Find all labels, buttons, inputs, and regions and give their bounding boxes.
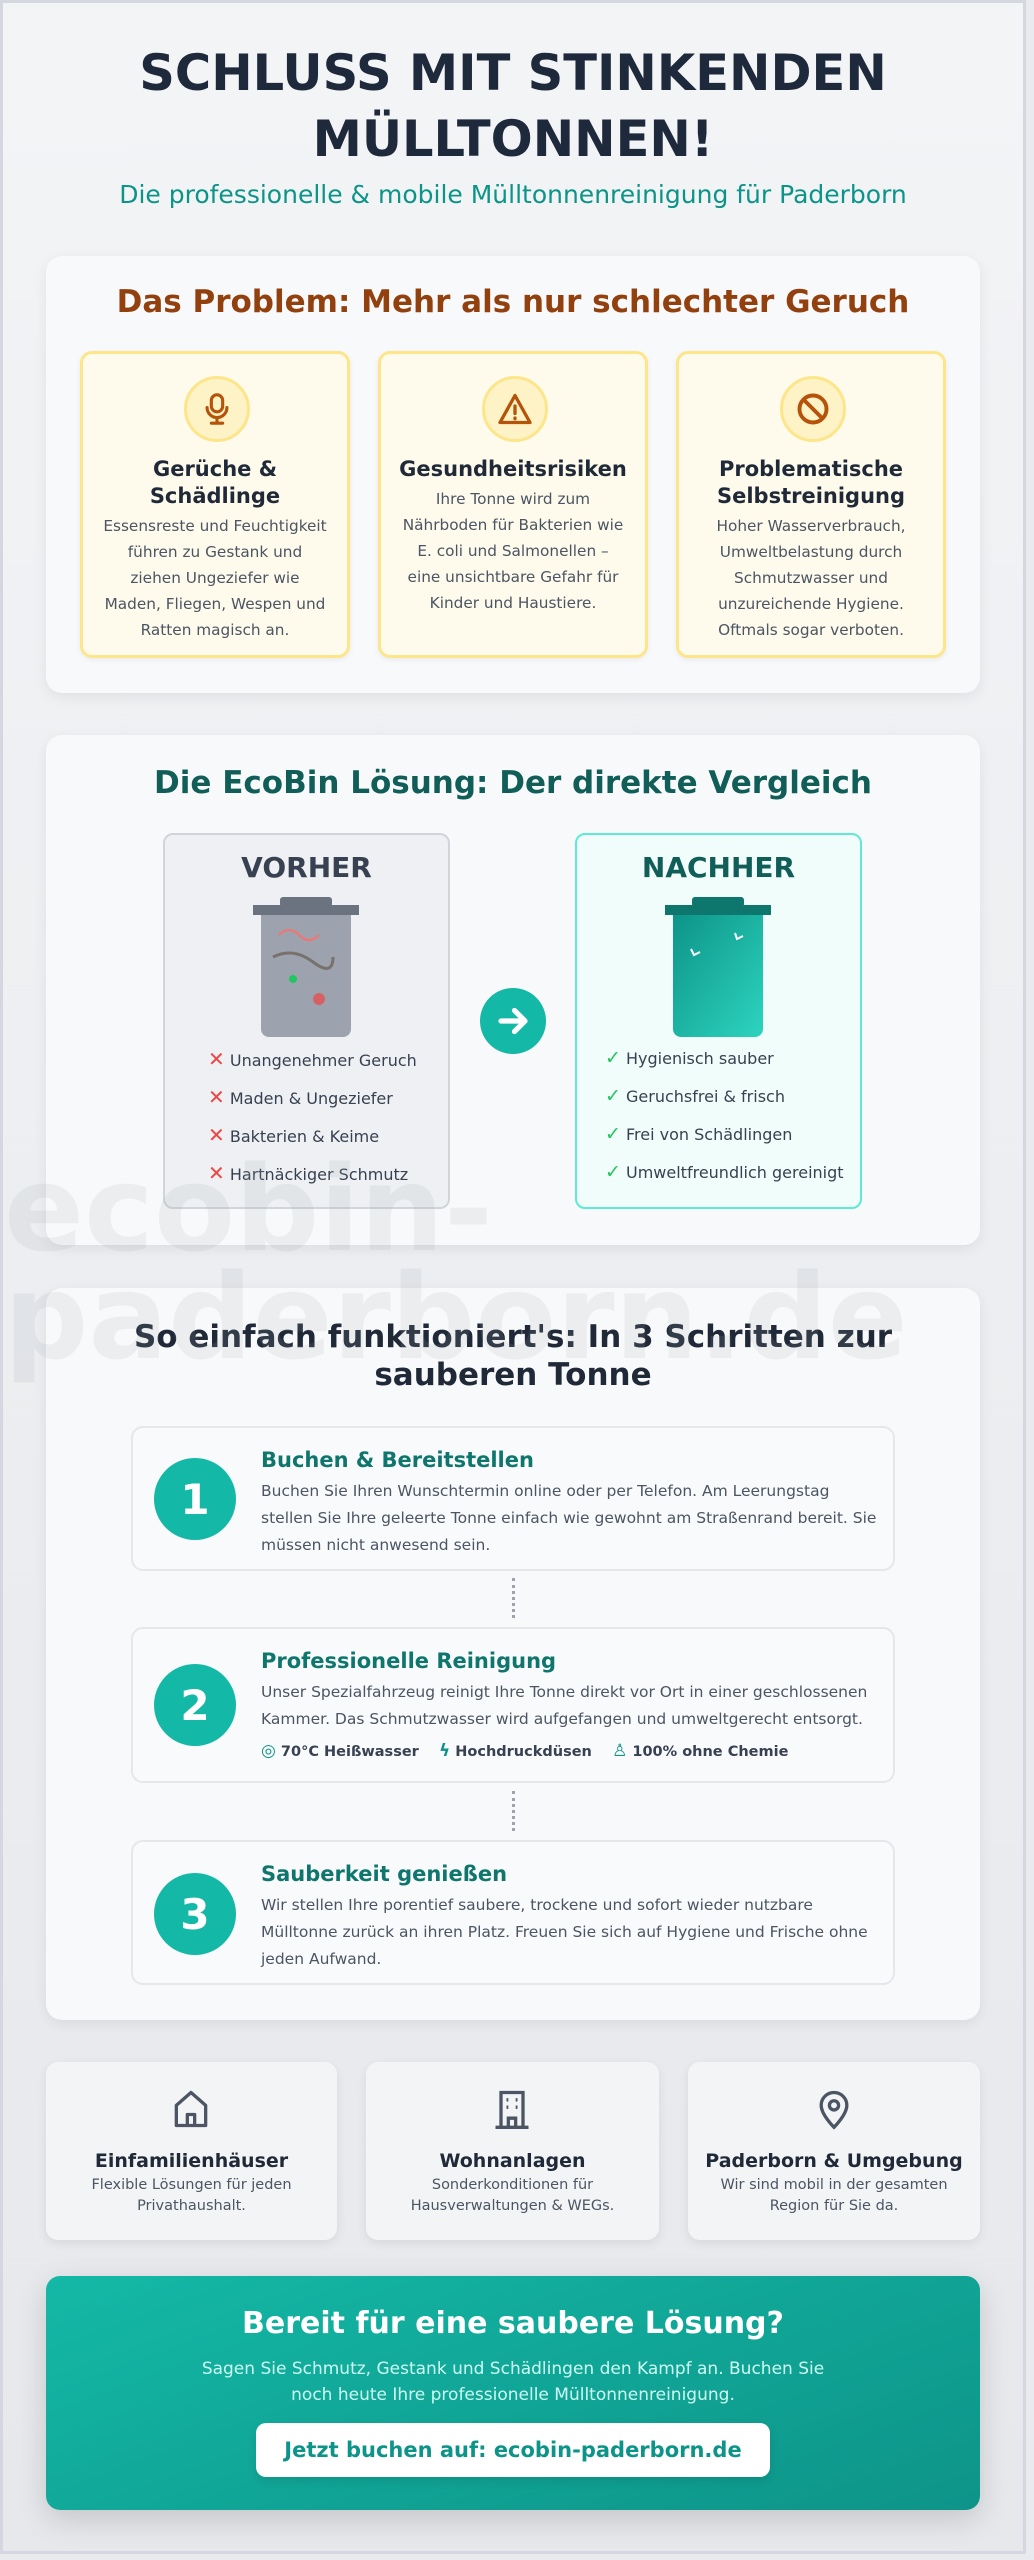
card: health risks: Gesundheitsrisiken (399, 457, 627, 481)
step 2: 2 (180, 1680, 210, 1730)
step 2: Professionelle Reinigung (261, 1649, 556, 1673)
list: nachher: ✓ Hygienisch sauber (605, 1047, 774, 1069)
heading: steps (134, 1319, 892, 1393)
card: single-family homes: Flexible Lösungen für jeden (91, 2177, 292, 2193)
list: vorher: ✕ Hartnäckiger Schmutz (208, 1161, 408, 1185)
features row: ◎ 70°C Heißwasser ϟ Hochdruckdüsen ♙ 100% ohne Chemie (261, 1741, 788, 1761)
step 1: Buchen & Bereitstellen (261, 1448, 534, 1472)
icon: building (496, 2090, 528, 2129)
box: vorher (163, 833, 450, 1209)
icon: microphone (184, 376, 250, 442)
step 1 (131, 1426, 895, 1571)
card: health risks: Kinder und Haustiere. (430, 594, 596, 612)
title: MÜLLTONNEN! (313, 110, 713, 168)
title: SCHLUSS MIT STINKENDEN (139, 44, 887, 102)
panel: problem (46, 256, 980, 693)
step 1: stellen Sie Ihre geleerte Tonne einfach wie gewohnt am Straßenrand bereit. Sie (261, 1509, 876, 1527)
cta panel (46, 2276, 980, 2510)
card: single-family homes: Privathaushalt. (137, 2198, 246, 2214)
list: vorher: ✕ Unangenehmer Geruch (208, 1047, 417, 1071)
step 2: Unser Spezialfahrzeug reinigt Ihre Tonne direkt vor Ort in einer geschlossenen (261, 1683, 867, 1701)
heading: steps: So einfach funktioniert's: In 3 Schritten zur (134, 1319, 892, 1355)
cta text: Sagen Sie Schmutz, Gestank und Schädlingen den Kampf an. Buchen Sie (202, 2359, 824, 2379)
list: nachher: ✓ Umweltfreundlich gereinigt (605, 1161, 844, 1183)
card: single-family homes (46, 2062, 337, 2240)
card: apartments: Sonderkonditionen für (432, 2177, 593, 2193)
cta button (256, 2423, 770, 2477)
card: self-cleaning (676, 351, 946, 658)
icon: dirty bin (253, 897, 359, 1037)
heading: problem: Das Problem: Mehr als nur schlechter Geruch (117, 284, 909, 320)
card: self-cleaning: Umweltbelastung durch (720, 543, 902, 561)
panel: steps (46, 1288, 980, 2020)
icon: house (174, 2090, 208, 2128)
arrow (480, 988, 546, 1054)
heading: solution: Die EcoBin Lösung: Der direkte Vergleich (154, 765, 872, 801)
list: vorher: ✕ Bakterien & Keime (208, 1123, 379, 1147)
card: smells & pests: Maden, Fliegen, Wespen und (105, 595, 325, 613)
list: nachher (605, 1047, 844, 1183)
box: nachher: NACHHER (642, 851, 795, 884)
icon: warning (482, 376, 548, 442)
watermark: paderborn.de (4, 1248, 908, 1386)
list: vorher (208, 1047, 417, 1185)
icon: location pin (820, 2090, 848, 2130)
step 2 (131, 1627, 895, 1783)
card: health risks (378, 351, 648, 658)
card: smells & pests (80, 351, 350, 658)
card: single-family homes: Einfamilienhäuser (95, 2150, 288, 2172)
card: region: Wir sind mobil in der gesamten (720, 2177, 948, 2193)
step 1: müssen nicht anwesend sein. (261, 1536, 490, 1554)
cta button: Jetzt buchen auf: ecobin-paderborn.de (284, 2438, 742, 2462)
step 3: jeden Aufwand. (261, 1950, 381, 1968)
card: health risks: E. coli und Salmonellen – (417, 542, 609, 560)
card: apartments (366, 2062, 659, 2240)
card: self-cleaning: Oftmals sogar verboten. (718, 621, 904, 639)
card: region (688, 2062, 980, 2240)
panel: solution comparison (46, 735, 980, 1245)
card: self-cleaning: unzureichende Hygiene. (718, 595, 904, 613)
list: vorher: ✕ Maden & Ungeziefer (208, 1085, 393, 1109)
list: nachher: ✓ Geruchsfrei & frisch (605, 1085, 785, 1107)
heading: steps: sauberen Tonne (374, 1357, 652, 1393)
icon: clean bin (665, 897, 771, 1037)
card: smells & pests: ziehen Ungeziefer wie (130, 569, 300, 587)
box: vorher: VORHER (241, 851, 372, 884)
card: region: Region für Sie da. (770, 2198, 898, 2214)
list: nachher: ✓ Frei von Schädlingen (605, 1123, 792, 1145)
card: smells & pests: Gerüche & (153, 457, 277, 481)
step 3: 3 (180, 1890, 210, 1938)
step 1: Buchen Sie Ihren Wunschtermin online oder per Telefon. Am Leerungstag (261, 1482, 829, 1500)
cta text (202, 2359, 824, 2405)
step 3 (131, 1840, 895, 1985)
card: self-cleaning: Selbstreinigung (717, 484, 905, 508)
card: health risks: Ihre Tonne wird zum (436, 490, 590, 508)
card: self-cleaning: Problematische (719, 457, 903, 481)
step 3: Mülltonne zurück an ihren Platz. Freuen Sie sich auf Hygiene und Frische ohne (261, 1923, 868, 1941)
title (139, 44, 887, 168)
step 3: Wir stellen Ihre porentief saubere, trockene und sofort wieder nutzbare (261, 1896, 813, 1914)
card: smells & pests: führen zu Gestank und (128, 543, 302, 561)
card: apartments: Wohnanlagen (439, 2150, 586, 2172)
card: smells & pests: Ratten magisch an. (141, 621, 289, 639)
card: health risks: Nährboden für Bakterien wie (403, 516, 623, 534)
card: self-cleaning: Schmutzwasser und (734, 569, 888, 587)
card: apartments: Hausverwaltungen & WEGs. (411, 2198, 614, 2214)
box: nachher (575, 833, 862, 1209)
card: smells & pests: Essensreste und Feuchtigkeit (103, 517, 327, 535)
card: health risks: eine unsichtbare Gefahr für (408, 568, 618, 586)
step 3: Sauberkeit genießen (261, 1862, 507, 1886)
step 1: 1 (180, 1474, 210, 1524)
card: region: Paderborn & Umgebung (705, 2150, 963, 2172)
step 2: Kammer. Das Schmutzwasser wird aufgefangen und umweltgerecht entsorgt. (261, 1710, 863, 1728)
watermark: ecobin- (4, 1140, 493, 1278)
card: smells & pests: Schädlinge (150, 484, 280, 508)
cta heading: Bereit für eine saubere Lösung? (242, 2306, 784, 2341)
cta text: noch heute Ihre professionelle Mülltonnenreinigung. (291, 2385, 735, 2405)
icon: prohibited (780, 376, 846, 442)
card: self-cleaning: Hoher Wasserverbrauch, (716, 517, 906, 535)
watermark (4, 1140, 908, 1386)
subtitle: Die professionelle & mobile Mülltonnenreinigung für Paderborn (119, 180, 907, 209)
